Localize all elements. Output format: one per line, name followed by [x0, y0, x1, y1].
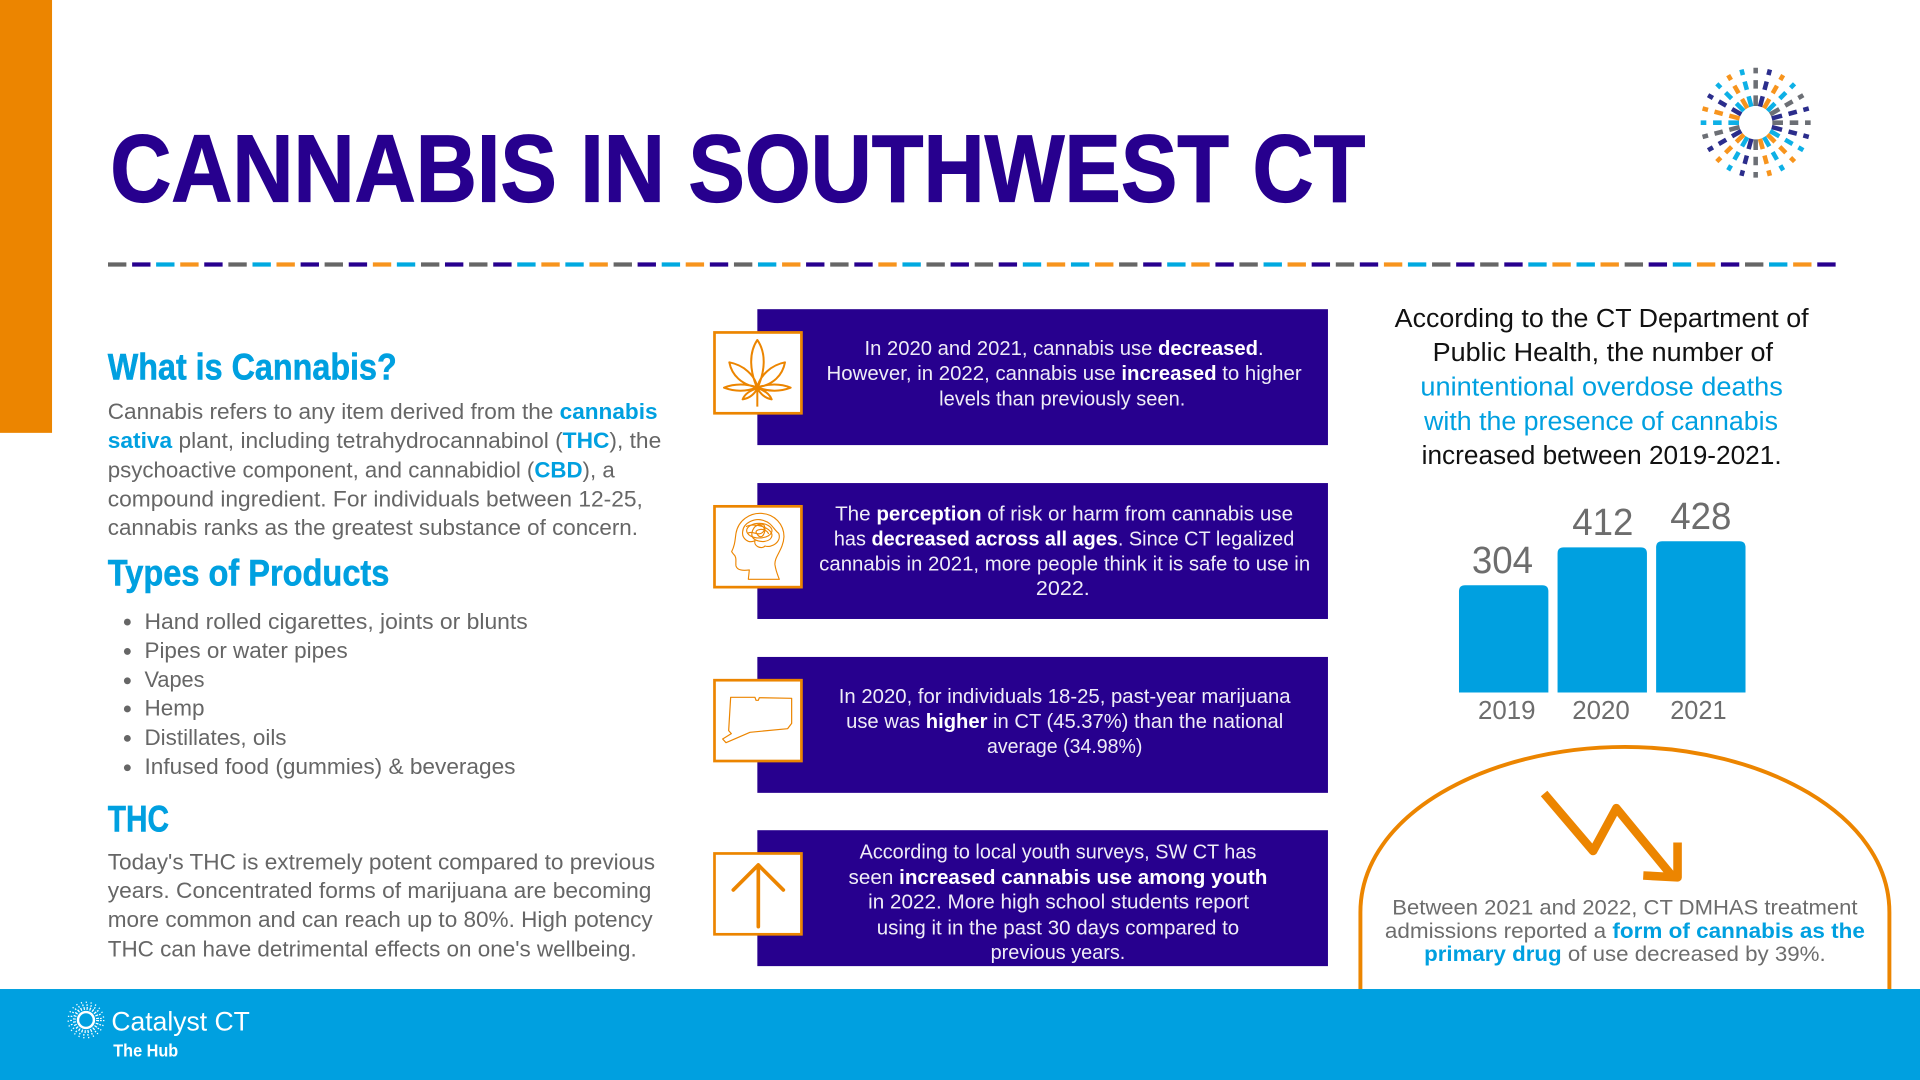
text block: overdose deaths statement: with the presence of cannabis — [1423, 408, 1778, 436]
text: 18-25 use in CT versus national: average (34.98%) — [987, 736, 1142, 758]
text: cannabis use decreased then increased: However, in 2022, cannabis use increased to higher — [827, 363, 1302, 385]
list: product types: Hemp — [144, 696, 204, 721]
bar chart: overdose deaths by year — [1459, 496, 1746, 725]
text: youth cannabis use increased — [849, 841, 1267, 964]
icon: Connecticut outline — [723, 697, 792, 743]
bar chart: overdose deaths by year: 428 — [1670, 496, 1731, 538]
heading: THC: THC — [108, 797, 169, 839]
footer band — [0, 989, 1920, 1080]
text: perception of harm decreased: The perception of risk or harm from cannabis use — [835, 503, 1293, 525]
text: 18-25 use in CT versus national: In 2020, for individuals 18-25, past-year marijuana — [839, 686, 1291, 708]
panel: perception of risk — [714, 483, 1328, 619]
text: youth cannabis use increased: using it in the past 30 days compared to — [877, 917, 1239, 939]
text: Catalyst CT wordmark: Catalyst CT — [111, 1006, 250, 1036]
text block: cannabis definition: compound ingredient. For individuals between 12-25, — [108, 486, 643, 511]
text block: overdose deaths statement: unintentional overdose deaths — [1420, 374, 1783, 402]
text: perception of harm decreased: 2022. — [1036, 578, 1090, 600]
logo: sunburst — [1701, 68, 1811, 178]
text block: overdose deaths statement: increased between 2019-2021. — [1422, 442, 1782, 470]
bar chart: overdose deaths by year: 2019 — [1478, 697, 1536, 725]
list: product types: Pipes or water pipes — [144, 638, 348, 663]
text block: overdose deaths statement: According to the CT Department of — [1395, 305, 1809, 333]
text: treatment admissions decreased — [1385, 895, 1865, 966]
list: product types: Infused food (gummies) & beverages — [144, 754, 516, 779]
callout: treatment admissions arch — [1360, 747, 1889, 992]
text: perception of harm decreased: cannabis in 2021, more people think it is safe to use in — [819, 554, 1310, 576]
text: youth cannabis use increased: According to local youth surveys, SW CT has — [860, 841, 1256, 863]
text block: overdose deaths statement: Public Health, the number of — [1433, 339, 1774, 367]
list: product types: Vapes — [144, 667, 204, 692]
text block: THC potency: Today's THC is extremely potent compared to previous — [108, 849, 655, 874]
panel: CT versus national use — [714, 657, 1328, 793]
text: cannabis use decreased then increased — [827, 338, 1302, 410]
bar chart: overdose deaths by year: 304 — [1472, 540, 1533, 582]
text: treatment admissions decreased: Between 2021 and 2022, CT DMHAS treatment — [1392, 895, 1858, 920]
icon: footer sunburst logo — [68, 1002, 104, 1038]
text block: cannabis definition: sativa plant, including tetrahydrocannabinol ( THC), the — [108, 428, 661, 453]
bar chart: overdose deaths by year: 2021 — [1670, 697, 1727, 725]
text: youth cannabis use increased: seen increased cannabis use among youth — [849, 867, 1267, 889]
text: The Hub: The Hub — [113, 1041, 178, 1061]
text: 18-25 use in CT versus national — [839, 686, 1291, 758]
bar chart: overdose deaths by year: 412 — [1572, 502, 1633, 544]
text block: THC potency: years. Concentrated forms of marijuana are becoming — [108, 878, 651, 903]
text: 18-25 use in CT versus national: use was higher in CT (45.37%) than the national — [846, 711, 1283, 733]
text: treatment admissions decreased: admissions reported a form of cannabis as the — [1385, 918, 1865, 943]
bar chart: overdose deaths by year: 2020 — [1572, 697, 1630, 725]
text block: cannabis definition: psychoactive component, and cannabidiol (CBD), a — [108, 458, 615, 483]
text: treatment admissions decreased: primary drug of use decreased by 39%. — [1424, 941, 1826, 966]
panel: cannabis use trend — [714, 309, 1328, 445]
text block: THC potency: more common and can reach up to 80%. High potency — [108, 907, 654, 932]
text block: cannabis definition: cannabis ranks as the greatest substance of concern. — [108, 515, 638, 540]
icon: up arrow — [733, 865, 783, 927]
text block: cannabis definition: Cannabis refers to any item derived from the cannabis — [108, 399, 658, 424]
list: product types — [124, 609, 528, 779]
heading: Types of Products: Types of Products — [108, 551, 389, 593]
text: cannabis use decreased then increased: In 2020 and 2021, cannabis use decreased. — [864, 338, 1264, 360]
panel: left column text — [108, 346, 661, 961]
text: cannabis use decreased then increased: levels than previously seen. — [939, 388, 1185, 410]
text: youth cannabis use increased: in 2022. More high school students report — [868, 892, 1249, 914]
text block: THC potency: THC can have detrimental effects on one's wellbeing. — [108, 936, 637, 961]
orange accent bar — [0, 0, 52, 433]
text: perception of harm decreased: has decreased across all ages. Since CT legalized — [834, 529, 1294, 551]
icon: cannabis leaf — [724, 340, 791, 407]
text block: cannabis definition — [108, 399, 661, 540]
text block: THC potency — [108, 849, 655, 961]
text: youth cannabis use increased: previous years. — [991, 942, 1125, 964]
icon: head with tangled brain — [732, 513, 784, 579]
list: product types: Hand rolled cigarettes, joints or blunts — [144, 609, 528, 634]
panel: local youth surveys — [714, 830, 1328, 966]
icon: zigzag down arrow — [1544, 793, 1678, 877]
heading: What is Cannabis?: What is Cannabis? — [108, 346, 397, 388]
list: product types: Distillates, oils — [144, 725, 287, 750]
text: perception of harm decreased — [819, 503, 1310, 600]
title: CANNABIS IN SOUTHWEST CT — [110, 116, 1365, 222]
text block: overdose deaths statement — [1395, 305, 1809, 470]
